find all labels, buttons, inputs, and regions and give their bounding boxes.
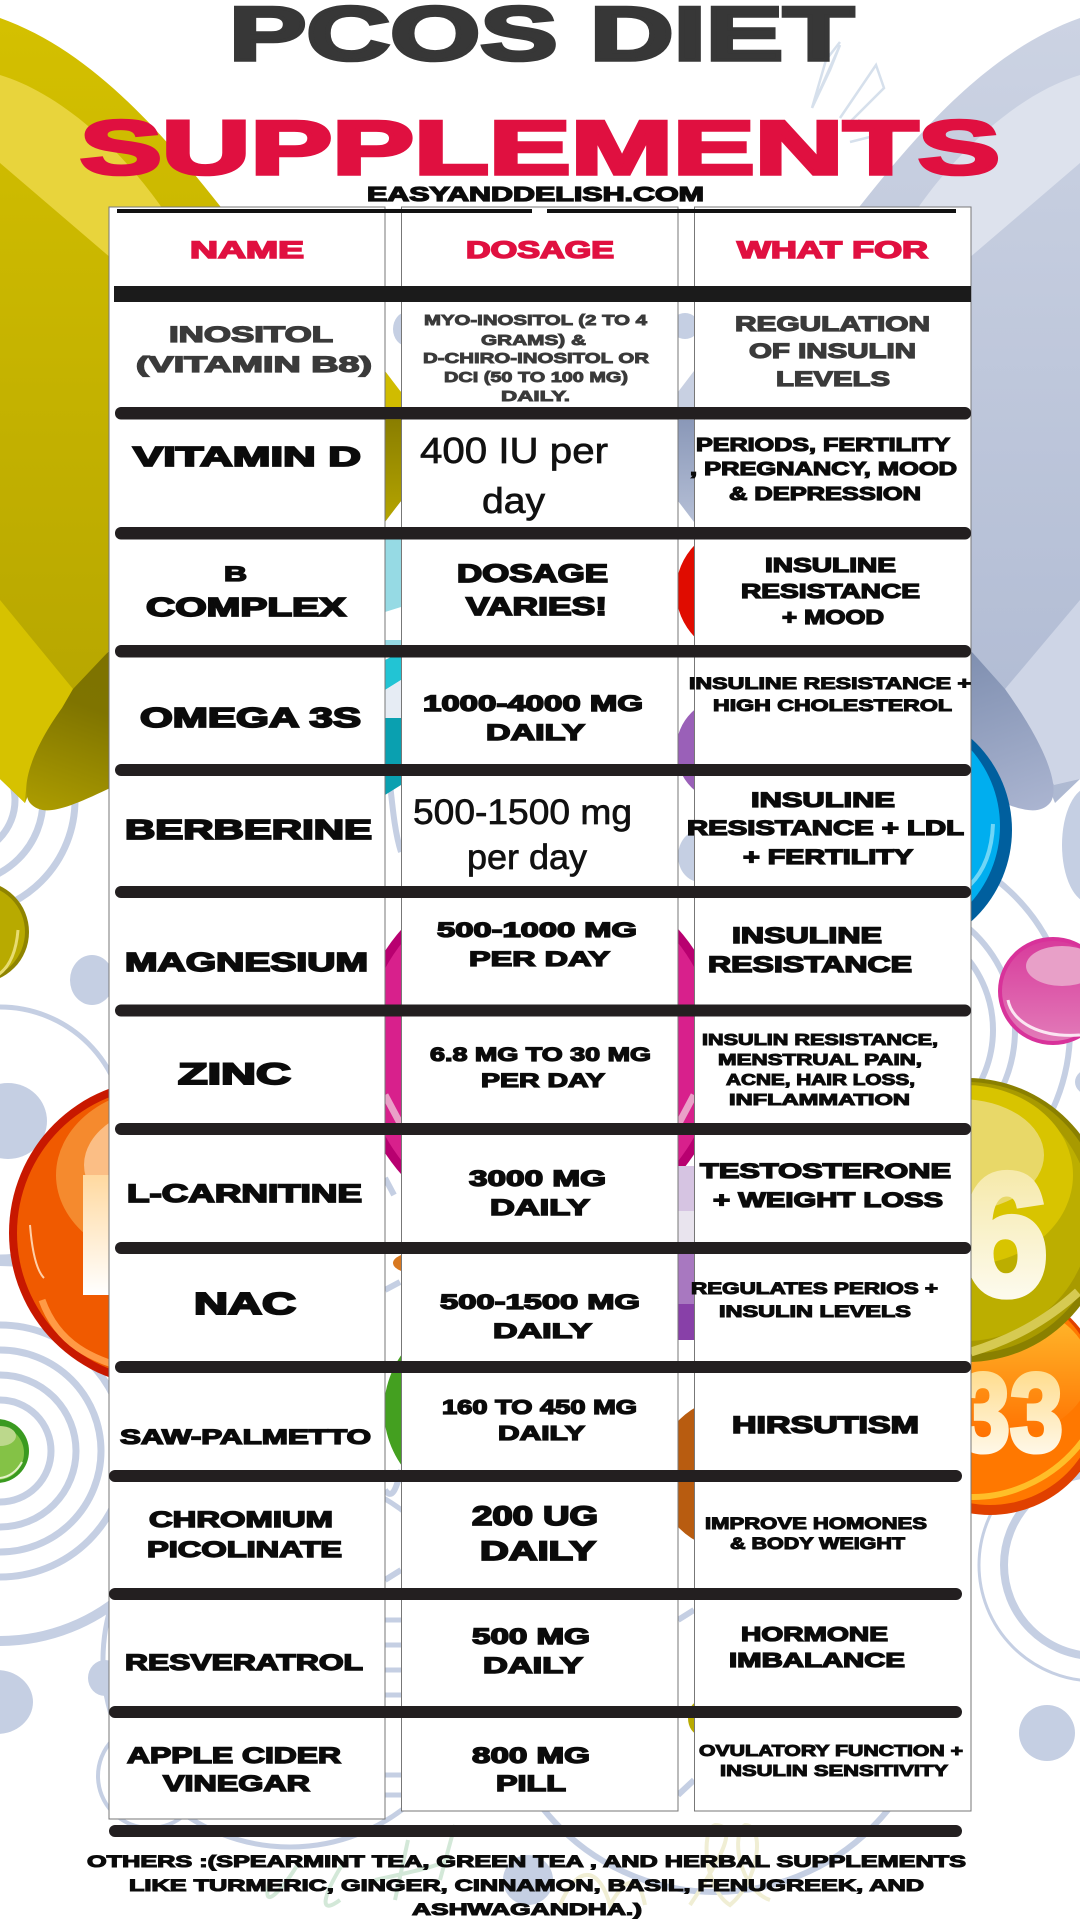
dosage: vitamin D: 400 IU per <box>420 430 608 471</box>
purpose: resveratrol: HORMONE <box>741 1624 888 1646</box>
name: omega 3s: OMEGA 3S <box>140 702 361 733</box>
icon: blue-grey capsule, right <box>678 18 1080 810</box>
purpose: resveratrol: IMBALANCE <box>729 1650 905 1672</box>
purpose: inositol: REGULATION <box>735 313 930 336</box>
dosage: omega 3s: 1000-4000 MG <box>423 691 643 716</box>
purpose: vitamin D <box>690 435 957 504</box>
purpose: chromium picolinate: & BODY WEIGHT <box>730 1534 906 1553</box>
name: inositol <box>136 322 372 377</box>
name: B complex: B <box>224 563 247 586</box>
dosage: berberine <box>413 793 632 877</box>
name: chromium picolinate: CHROMIUM <box>149 1507 333 1532</box>
purpose: berberine: + FERTILITY <box>743 846 913 869</box>
name: magnesium: MAGNESIUM <box>125 947 368 977</box>
row: apple cider vinegar <box>127 1743 963 1796</box>
purpose: magnesium: INSULINE <box>732 923 882 948</box>
capsules and balls seen through column gaps <box>355 525 811 1735</box>
purpose: B complex <box>741 555 920 629</box>
purpose: omega 3s: INSULINE RESISTANCE + <box>689 674 971 693</box>
purpose: berberine: RESISTANCE + LDL <box>687 817 964 840</box>
row: berberine <box>125 789 964 877</box>
header rules <box>114 209 971 302</box>
website credit: EASYANDDELISH.COM <box>367 184 704 206</box>
name: L-carnitine: L-CARNITINE <box>127 1180 362 1208</box>
ball: orange vitamin, left <box>9 1079 317 1387</box>
purpose: NAC <box>691 1279 938 1321</box>
dosage: chromium picolinate: 200 UG <box>472 1501 598 1531</box>
purpose: L-carnitine <box>700 1160 951 1212</box>
ball: orange vitamin B3, right: 33 <box>957 1352 1063 1475</box>
dosage: NAC: DAILY <box>493 1320 592 1343</box>
purpose: vitamin D: PERIODS, FERTILITY <box>696 435 950 455</box>
decorative sketch lines near title <box>812 42 890 142</box>
name: chromium picolinate <box>147 1507 342 1562</box>
dosage: L-carnitine: 3000 MG <box>469 1166 606 1191</box>
name: inositol: (VITAMIN B8) <box>136 352 372 377</box>
purpose: apple cider vinegar: INSULIN SENSITIVITY <box>720 1763 948 1780</box>
purpose: chromium picolinate <box>705 1514 927 1553</box>
dosage: zinc: PER DAY <box>481 1071 605 1092</box>
ball: orange vitamin B3, right <box>875 1285 1080 1515</box>
footer note: other supplements: OTHERS :(SPEARMINT TEA, GREEN TEA , AND HERBAL SUPPLEMENTS <box>87 1852 966 1871</box>
purpose: inositol: OF INSULIN <box>749 340 916 363</box>
dosage: berberine: 500-1500 mg <box>413 793 632 832</box>
dosage: B complex <box>457 560 608 621</box>
script lettering behind footer <box>267 1825 770 1906</box>
dosage: magnesium: 500-1000 MG <box>437 919 637 942</box>
purpose: NAC: INSULIN LEVELS <box>719 1302 911 1321</box>
ball: yellow vitamin B6, right <box>825 1078 1080 1362</box>
row: vitamin D <box>133 430 957 521</box>
purpose: zinc <box>702 1032 938 1109</box>
dosage: inositol: D-CHIRO-INOSITOL OR <box>423 350 649 367</box>
purpose: zinc: INSULIN RESISTANCE, <box>702 1032 938 1049</box>
dosage: inositol: DCI (50 TO 100 MG) <box>444 369 628 386</box>
dosage: zinc: 6.8 MG TO 30 MG <box>430 1045 651 1066</box>
name: B complex <box>146 563 347 622</box>
dosage: resveratrol: 500 MG <box>472 1624 590 1649</box>
dosage: magnesium: PER DAY <box>469 948 610 971</box>
row: saw-palmetto <box>120 1397 919 1449</box>
dosage: omega 3s: DAILY <box>486 720 585 745</box>
name: chromium picolinate: PICOLINATE <box>147 1537 342 1562</box>
dosage: L-carnitine <box>469 1166 606 1220</box>
name: zinc: ZINC <box>178 1058 291 1091</box>
purpose: magnesium: RESISTANCE <box>708 952 912 977</box>
dosage: vitamin D <box>420 430 608 521</box>
purpose: omega 3s <box>689 674 971 715</box>
row divider bars <box>109 407 971 1837</box>
purpose: zinc: MENSTRUAL PAIN, <box>718 1052 922 1069</box>
ball: green, left <box>0 1419 29 1483</box>
purpose: B complex: INSULINE <box>765 555 896 577</box>
purpose: L-carnitine: + WEIGHT LOSS <box>713 1189 943 1212</box>
dosage: NAC <box>440 1291 640 1343</box>
dosage: B complex: VARIES! <box>466 593 607 621</box>
row: resveratrol <box>125 1624 905 1678</box>
dosage: inositol <box>423 312 649 405</box>
purpose: apple cider vinegar: OVULATORY FUNCTION + <box>699 1743 963 1760</box>
dosage: chromium picolinate <box>472 1501 598 1566</box>
name: apple cider vinegar: VINEGAR <box>163 1771 310 1796</box>
dosage: berberine: per day <box>467 838 588 877</box>
dosage: zinc <box>430 1045 651 1092</box>
footer note: other supplements: LIKE TURMERIC, GINGER, CINNAMON, BASIL, FENUGREEK, AND <box>129 1876 924 1895</box>
row: zinc <box>178 1032 938 1109</box>
purpose: zinc: ACNE, HAIR LOSS, <box>726 1072 915 1089</box>
row: chromium picolinate <box>147 1501 927 1566</box>
purpose: inositol: LEVELS <box>776 368 890 391</box>
dosage: NAC: 500-1500 MG <box>440 1291 640 1314</box>
dosage: saw-palmetto <box>442 1397 637 1445</box>
title: SUPPLEMENTS: SUPPLEMENTS <box>80 106 1000 191</box>
purpose: B complex: + MOOD <box>782 607 884 629</box>
header: what for: WHAT FOR <box>737 237 928 264</box>
purpose: berberine <box>687 789 964 869</box>
name: saw-palmetto: SAW-PALMETTO <box>120 1426 371 1449</box>
header: dosage: DOSAGE <box>466 237 614 264</box>
name: NAC: NAC <box>194 1286 296 1321</box>
dosage: apple cider vinegar: 800 MG <box>472 1743 590 1768</box>
dosage: apple cider vinegar: PILL <box>496 1771 566 1796</box>
purpose: saw-palmetto: HIRSUTISM <box>732 1412 919 1439</box>
purpose: berberine: INSULINE <box>751 789 895 812</box>
row: inositol <box>136 312 930 405</box>
purpose: L-carnitine: TESTOSTERONE <box>700 1160 951 1183</box>
header: name: NAME <box>190 237 304 264</box>
dosage: resveratrol: DAILY <box>483 1653 584 1678</box>
dosage: B complex: DOSAGE <box>457 560 608 588</box>
row: L-carnitine <box>127 1160 951 1220</box>
purpose: zinc: INFLAMMATION <box>729 1092 910 1109</box>
purpose: resveratrol <box>729 1624 905 1672</box>
ball: yellow, left edge <box>0 881 29 983</box>
purpose: apple cider vinegar <box>699 1743 963 1780</box>
purpose: inositol <box>735 313 930 391</box>
purpose: chromium picolinate: IMPROVE HOMONES <box>705 1514 927 1533</box>
purpose: vitamin D: , PREGNANCY, MOOD <box>690 459 957 479</box>
name: apple cider vinegar: APPLE CIDER <box>127 1743 341 1768</box>
dosage: inositol: GRAMS) & <box>481 332 586 349</box>
dosage: inositol: DAILY. <box>501 388 570 405</box>
dosage: chromium picolinate: DAILY <box>480 1536 596 1566</box>
name: inositol: INOSITOL <box>169 322 333 347</box>
footer note: other supplements: ASHWAGANDHA.) <box>412 1900 642 1919</box>
purpose: omega 3s: HIGH CHOLESTEROL <box>713 696 952 715</box>
purpose: B complex: RESISTANCE <box>741 581 920 603</box>
name: apple cider vinegar <box>127 1743 341 1796</box>
dosage: saw-palmetto: 160 TO 450 MG <box>442 1397 637 1419</box>
dosage: L-carnitine: DAILY <box>490 1195 591 1220</box>
name: berberine: BERBERINE <box>125 814 372 845</box>
ball: yellow vitamin B6, right: 6 <box>962 1139 1048 1331</box>
ball: blue, right <box>766 707 1012 953</box>
row: NAC <box>194 1279 938 1343</box>
ball: pink, right <box>998 937 1080 1045</box>
dosage: inositol: MYO-INOSITOL (2 TO 4 <box>424 312 648 329</box>
name: vitamin D: VITAMIN D <box>133 441 361 472</box>
dosage: vitamin D: day <box>482 480 545 521</box>
dosage: magnesium <box>437 919 637 971</box>
row: omega 3s <box>140 674 971 745</box>
dosage: resveratrol <box>472 1624 590 1678</box>
purpose: NAC: REGULATES PERIOS + <box>691 1279 938 1298</box>
purpose: magnesium <box>708 923 912 977</box>
name: B complex: COMPLEX <box>146 592 347 622</box>
dosage: saw-palmetto: DAILY <box>498 1423 586 1445</box>
dosage: apple cider vinegar <box>472 1743 590 1796</box>
column headers <box>190 237 928 264</box>
dosage: omega 3s <box>423 691 643 745</box>
purpose: vitamin D: & DEPRESSION <box>729 484 921 504</box>
row: B complex <box>146 555 920 629</box>
icon: yellow capsule, left <box>0 18 401 810</box>
name: resveratrol: RESVERATROL <box>125 1650 363 1675</box>
table columns <box>109 207 971 1819</box>
row: magnesium <box>125 919 912 977</box>
footer note: other supplements <box>87 1852 966 1919</box>
